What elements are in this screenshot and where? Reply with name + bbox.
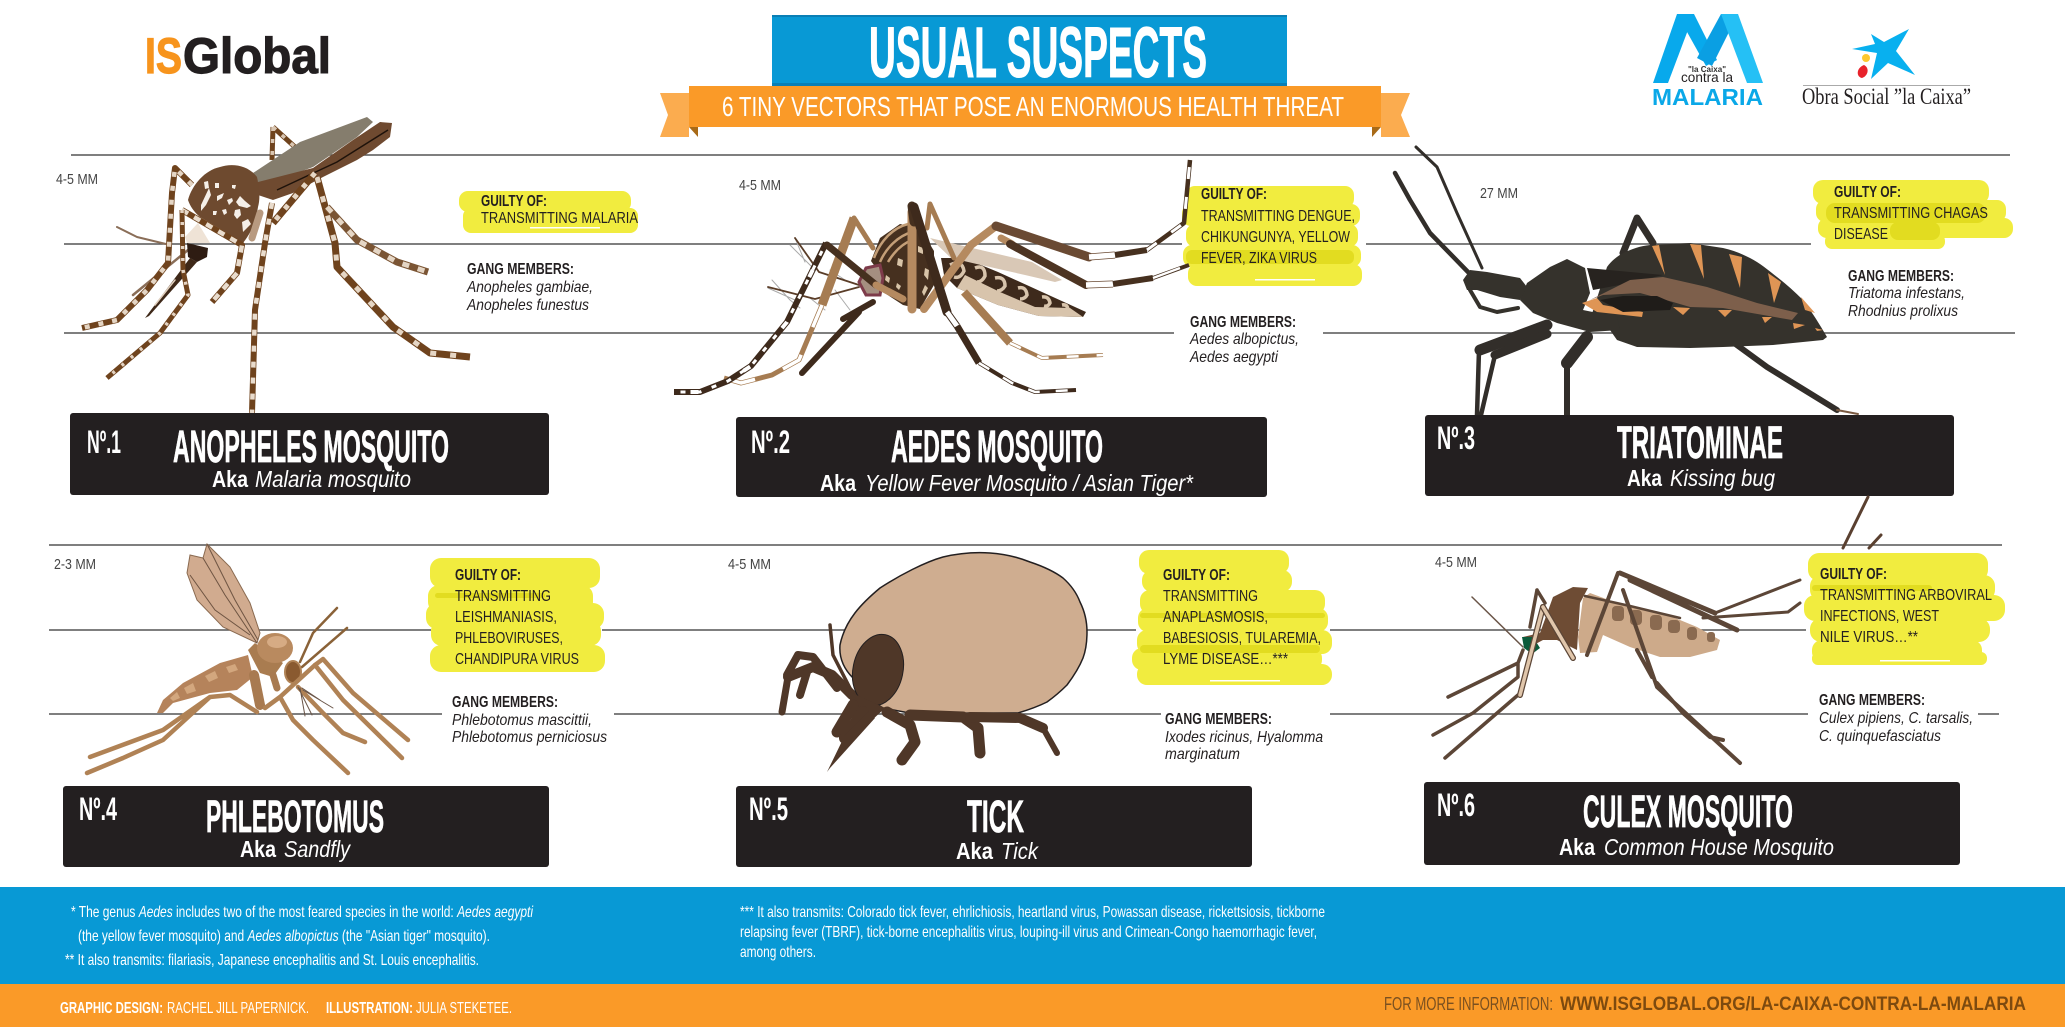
gang members: GANG MEMBERS:: [1848, 268, 1954, 285]
guilty of callout: GUILTY OF:: [1201, 186, 1267, 203]
name plate: Nº.6: [1437, 787, 1475, 823]
gang members: Triatoma infestans,: [1848, 285, 1965, 302]
guilty of callout: GUILTY OF:: [1820, 566, 1887, 583]
gang members: Aedes albopictus,: [1189, 331, 1299, 348]
guilty of callout: TRANSMITTING MALARIA: [481, 210, 638, 227]
gang members: [1165, 711, 1323, 763]
credits footer: FOR MORE INFORMATION:: [1384, 994, 1553, 1014]
gang members: Phlebotomus mascittii,: [452, 712, 592, 729]
footnotes band: ** It also transmits: filariasis, Japanese encephalitis and St. Louis encephalitis.: [65, 952, 479, 969]
guilty of callout: LEISHMANIASIS,: [455, 609, 557, 626]
panel: No.1 Anopheles: [56, 117, 638, 495]
illustration: tick: [782, 553, 1087, 772]
guilty of callout: TRANSMITTING ARBOVIRAL: [1820, 587, 1992, 604]
gang members: GANG MEMBERS:: [467, 261, 574, 278]
gang members: GANG MEMBERS:: [452, 694, 558, 711]
guilty of callout: NILE VIRUS…**: [1820, 629, 1918, 646]
gang members: [466, 261, 593, 314]
gang members: marginatum: [1165, 746, 1240, 763]
logo: Obra Social la Caixa: [1802, 29, 1971, 109]
name plate: Tick: [1001, 838, 1039, 864]
name plate: [70, 413, 549, 495]
name plate: Aka: [820, 470, 856, 496]
gang members: Phlebotomus perniciosus: [452, 729, 607, 746]
name plate: AEDES MOSQUITO: [891, 421, 1103, 472]
name plate: [63, 786, 549, 867]
gang members: Ixodes ricinus, Hyalomma: [1165, 729, 1323, 746]
name plate: TRIATOMINAE: [1617, 417, 1783, 468]
gang members: [1819, 692, 1973, 745]
logo: ISGlobal: Global: [183, 28, 331, 84]
guilty of callout: LYME DISEASE…***: [1163, 651, 1288, 668]
guilty of callout: ANAPLASMOSIS,: [1163, 609, 1268, 626]
name plate: Kissing bug: [1670, 465, 1775, 491]
panel: No.6 Culex: [1424, 497, 2005, 865]
name plate: Malaria mosquito: [255, 466, 411, 492]
subtitle ribbon: 6 TINY VECTORS THAT POSE AN ENORMOUS HEALTH THREAT: [722, 91, 1344, 122]
name plate: Nº.3: [1437, 420, 1475, 456]
size label: 4-5 MM: [728, 556, 771, 573]
name plate: Nº.2: [751, 424, 790, 460]
credits footer: JULIA STEKETEE.: [416, 1000, 512, 1017]
footnotes band: *** It also transmits: Colorado tick fever, ehrlichiosis, heartland virus, Powassan disease, rickettsiosis, tickborne: [740, 904, 1325, 921]
guilty of callout: TRANSMITTING CHAGAS: [1834, 205, 1988, 222]
logo: la Caixa contra la Malaria: contra la: [1681, 69, 1733, 85]
size label: 4-5 MM: [1435, 554, 1477, 571]
guilty of callout: FEVER, ZIKA VIRUS: [1201, 250, 1317, 267]
credits footer: WWW.ISGLOBAL.ORG/LA-CAIXA-CONTRA-LA-MALARIA: [1560, 994, 2026, 1015]
name plate: CULEX MOSQUITO: [1583, 786, 1793, 837]
guilty of callout: [1804, 553, 2005, 665]
credits footer: ILLUSTRATION:: [326, 1000, 413, 1017]
size label: 27 MM: [1480, 185, 1518, 202]
name plate: TICK: [967, 791, 1024, 842]
gang members: GANG MEMBERS:: [1190, 314, 1296, 331]
credits footer: RACHEL JILL PAPERNICK.: [167, 1000, 309, 1017]
guilty of callout: [1132, 550, 1332, 685]
gang members: Anopheles gambiae,: [466, 279, 593, 296]
gang members: Anopheles funestus: [466, 297, 589, 314]
name plate: ANOPHELES MOSQUITO: [173, 421, 449, 472]
credits footer: [0, 984, 2065, 1027]
guilty of callout: DISEASE: [1834, 226, 1888, 243]
size label: 4-5 MM: [739, 177, 781, 194]
leg tips crossing callout: [1147, 160, 1190, 278]
subtitle ribbon: [660, 86, 1410, 137]
credits footer: GRAPHIC DESIGN:: [60, 1000, 163, 1017]
name plate: PHLEBOTOMUS: [206, 791, 384, 842]
panel: No.2 Aedes: [674, 160, 1362, 497]
guilty of callout: GUILTY OF:: [1163, 567, 1230, 584]
panel: No.5 Tick: [728, 550, 1332, 867]
gang members: GANG MEMBERS:: [1165, 711, 1272, 728]
guilty of callout: [1182, 186, 1362, 286]
name plate: Aka: [212, 466, 248, 492]
footnotes band: (the yellow fever mosquito) and Aedes albopictus (the "Asian tiger" mosquito).: [78, 928, 490, 945]
name plate: Aka: [1559, 834, 1595, 860]
title banner: USUAL SUSPECTS: [869, 14, 1207, 93]
guilty of callout: GUILTY OF:: [481, 193, 547, 210]
name plate: [1424, 782, 1960, 865]
gang members: [1189, 314, 1299, 366]
guilty of callout: TRANSMITTING: [1163, 588, 1258, 605]
gang members: Culex pipiens, C. tarsalis,: [1819, 710, 1973, 727]
logo: la Caixa contra la Malaria: MALARIA: [1652, 84, 1763, 110]
gang members: C. quinquefasciatus: [1819, 728, 1941, 745]
guilty of callout: [426, 558, 605, 672]
footnotes band: among others.: [740, 944, 816, 961]
name plate: [1425, 415, 1954, 496]
name plate: Sandfly: [284, 836, 351, 862]
name plate: Aka: [956, 838, 993, 864]
name plate: Common House Mosquito: [1604, 834, 1834, 860]
name plate: Yellow Fever Mosquito / Asian Tiger*: [865, 470, 1194, 496]
footnotes band: [0, 887, 2065, 984]
title banner: [772, 14, 1287, 93]
guilty of callout: TRANSMITTING DENGUE,: [1201, 208, 1355, 225]
name plate: [736, 417, 1267, 497]
illustration: Aedes mosquito: [674, 204, 1153, 392]
size label: 2-3 MM: [54, 556, 96, 573]
name plate: Aka: [240, 836, 276, 862]
gang members: [1848, 268, 1965, 320]
illustration: sandfly: [87, 544, 408, 773]
footnotes band: * The genus Aedes includes two of the most feared species in the world: Aedes aegypti: [71, 904, 533, 921]
guilty of callout: [1813, 180, 2013, 249]
illustration: Culex mosquito: [1433, 497, 1881, 763]
gang members: GANG MEMBERS:: [1819, 692, 1925, 709]
illustration: kissing bug: [1395, 147, 1858, 415]
guilty of callout: BABESIOSIS, TULAREMIA,: [1163, 630, 1321, 647]
guilty of callout: CHIKUNGUNYA, YELLOW: [1201, 229, 1351, 246]
size label: 4-5 MM: [56, 171, 98, 188]
guilty of callout: CHANDIPURA VIRUS: [455, 651, 579, 668]
guilty of callout: GUILTY OF:: [455, 567, 521, 584]
illustration: Anopheles mosquito: [82, 117, 470, 413]
gang members: [452, 694, 607, 746]
logo: ISGlobal: IS: [145, 28, 182, 84]
gang members: Aedes aegypti: [1189, 349, 1278, 366]
logo: Obra Social la Caixa: Obra Social ”la Caixa”: [1802, 84, 1971, 109]
guilty of callout: INFECTIONS, WEST: [1820, 608, 1939, 625]
guilty of callout: TRANSMITTING: [455, 588, 551, 605]
name plate: Nº.5: [749, 791, 788, 827]
logo: la Caixa contra la Malaria: [1652, 14, 1763, 110]
panel: No.3 Triatominae: [1395, 147, 2013, 496]
name plate: Nº.1: [87, 424, 121, 460]
name plate: Nº.4: [79, 791, 117, 827]
guilty of callout: PHLEBOVIRUSES,: [455, 630, 563, 647]
footnotes band: relapsing fever (TBRF), tick-borne encephalitis virus, louping-ill virus and Crimean-Congo haemorrhagic fever,: [740, 924, 1317, 941]
name plate: [736, 786, 1252, 867]
panel: No.4 Phlebotomus: [54, 544, 607, 867]
logo: la Caixa contra la Malaria: "la Caixa": [1688, 65, 1726, 74]
guilty of callout: GUILTY OF:: [1834, 184, 1901, 201]
name plate: Aka: [1627, 465, 1662, 491]
guilty of callout: [459, 191, 638, 233]
gang members: Rhodnius prolixus: [1848, 303, 1958, 320]
